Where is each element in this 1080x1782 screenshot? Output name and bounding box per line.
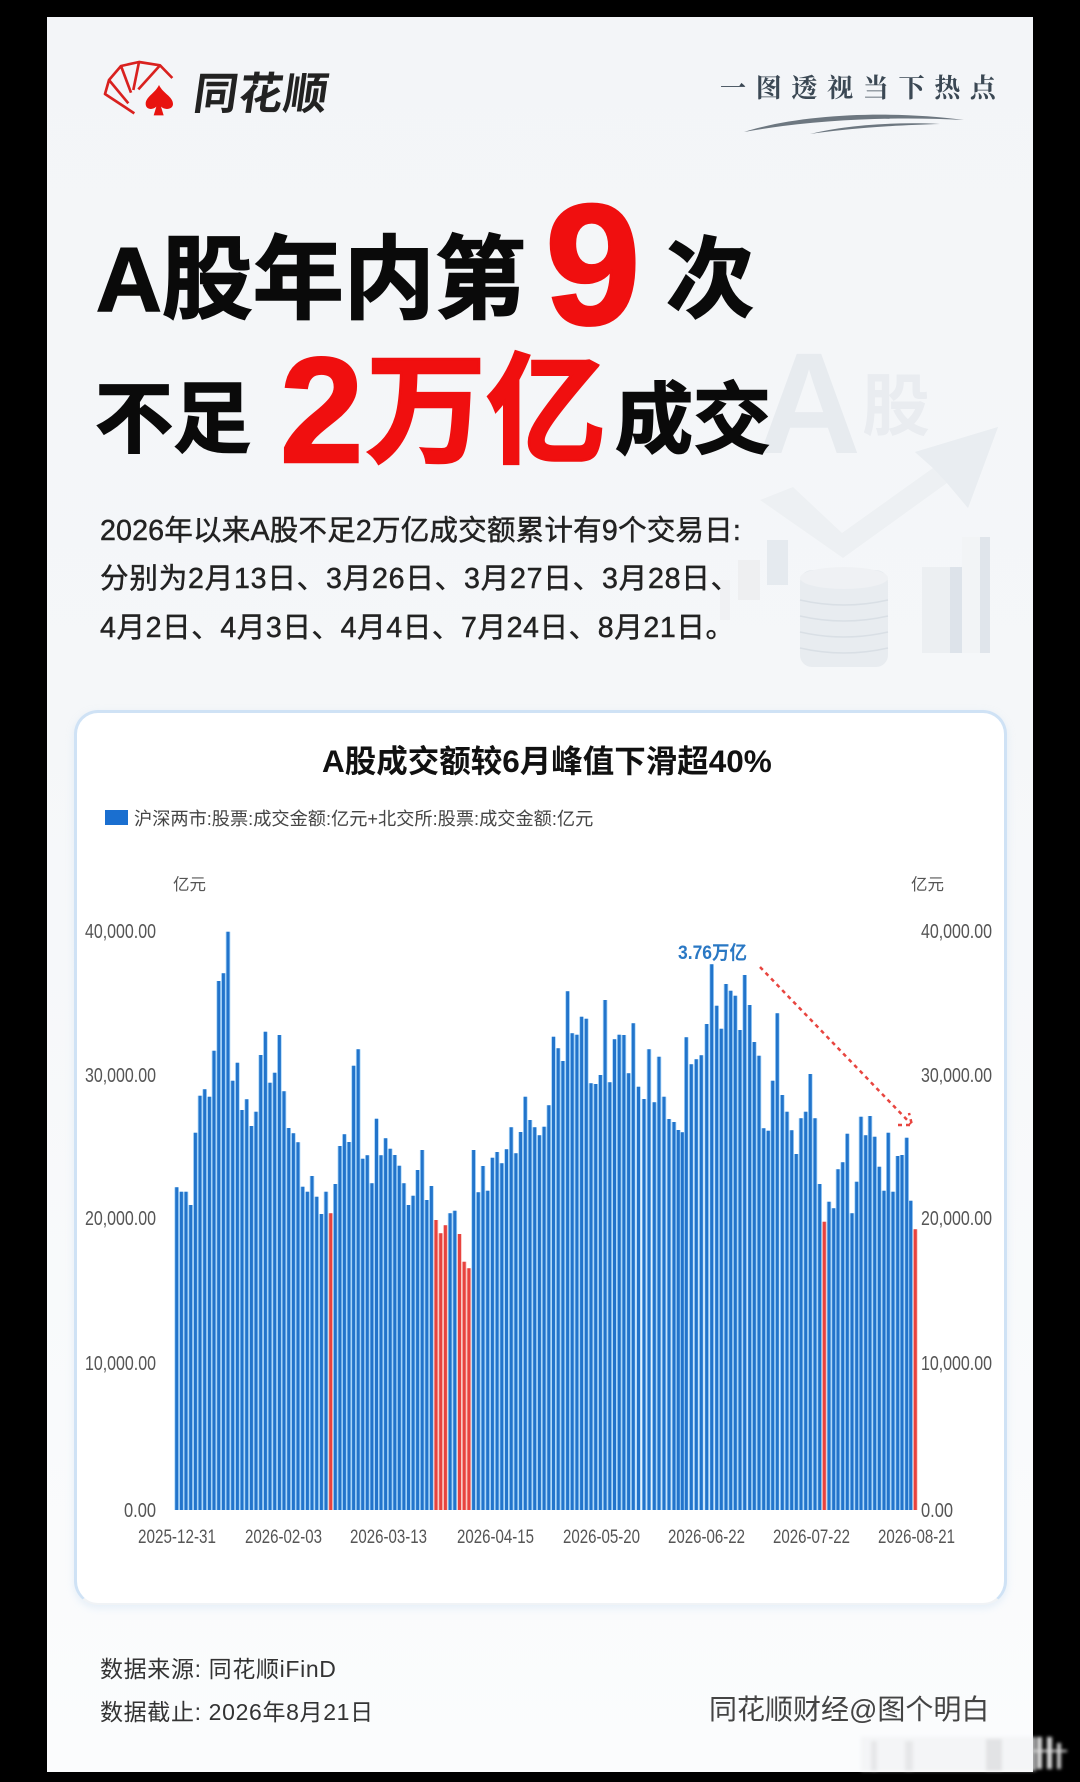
footer credit: 同花顺财经@图个明白	[709, 1694, 989, 1725]
title text: A股年内第: A股年内第	[96, 230, 526, 331]
title line 1	[96, 169, 754, 361]
right axis unit: 亿元	[911, 875, 944, 894]
logo: 同花顺	[104, 60, 333, 119]
right y axis labels: 30,000.00	[921, 1065, 992, 1087]
red bar halos	[331, 1213, 915, 1510]
data source: 数据来源: 同花顺iFinD	[100, 1656, 337, 1682]
description line 2: 分别为2月13日、3月26日、3月27日、3月28日、	[100, 563, 740, 595]
icon: fanned cards with spade	[104, 60, 174, 116]
x axis date labels: 2026-04-15	[457, 1527, 534, 1548]
x axis date labels: 2026-05-20	[563, 1527, 640, 1548]
title text: 不足: 不足	[95, 375, 251, 463]
right y axis labels: 40,000.00	[921, 921, 992, 943]
x axis date labels: 2026-08-21	[878, 1527, 955, 1548]
description line 1: 2026年以来A股不足2万亿成交额累计有9个交易日:	[100, 515, 741, 547]
title number: 9: 9	[545, 169, 641, 361]
right y axis labels: 0.00	[921, 1500, 953, 1522]
left y axis labels	[85, 921, 156, 1522]
slogan: 一图透视当下热点: 一图透视当下热点	[720, 74, 1006, 103]
title text: 万亿: 万亿	[366, 345, 606, 479]
red bars: sessions under 2 trillion	[331, 1213, 915, 1510]
right y axis labels: 20,000.00	[921, 1208, 992, 1230]
footer source notes	[100, 1656, 374, 1725]
right y axis labels	[921, 921, 992, 1522]
x axis date labels: 2026-03-13	[350, 1527, 427, 1548]
watermark smudge bottom right	[860, 1734, 1069, 1774]
left y axis labels: 0.00	[124, 1500, 156, 1522]
title text: 成交: 成交	[615, 376, 771, 464]
x axis date labels: 2026-02-03	[245, 1527, 322, 1548]
left y axis labels: 10,000.00	[85, 1353, 156, 1375]
left axis unit: 亿元	[173, 875, 206, 894]
watermark illustration: A股, arrow, coins and bars: A	[757, 323, 861, 484]
logo wordmark: 同花顺	[191, 70, 333, 119]
blue bars	[177, 932, 911, 1510]
left y axis labels: 30,000.00	[85, 1065, 156, 1087]
legend label: 沪深两市:股票:成交金额:亿元+北交所:股票:成交金额:亿元	[134, 809, 593, 829]
x axis date labels: 2025-12-31	[138, 1527, 216, 1548]
title text: 次: 次	[666, 230, 754, 329]
description line 3: 4月2日、4月3日、4月4日、7月24日、8月21日。	[100, 612, 735, 644]
title number: 2万亿: 2	[280, 326, 363, 494]
left y axis labels: 40,000.00	[85, 921, 156, 943]
x axis date labels	[138, 1527, 955, 1548]
panel: chart card	[74, 710, 1007, 1605]
x axis date labels: 2026-07-22	[773, 1527, 850, 1548]
description text	[100, 515, 741, 644]
title line 2	[95, 326, 771, 494]
legend swatch	[105, 810, 128, 825]
chart heading: A股成交额较6月峰值下滑超40%	[322, 743, 772, 779]
watermark illustration: A股, arrow, coins and bars: 股	[862, 369, 930, 445]
watermark illustration: A股, arrow, coins and bars	[757, 323, 998, 667]
x axis date labels: 2026-06-22	[668, 1527, 745, 1548]
data cutoff date: 数据截止: 2026年8月21日	[100, 1699, 374, 1725]
blue bar halos	[177, 932, 911, 1510]
right y axis labels: 10,000.00	[921, 1353, 992, 1375]
arrow: dotted decline from peak	[760, 967, 912, 1125]
slogan brush strokes	[744, 114, 964, 134]
peak callout: 3.76万亿: 3.76万亿	[678, 942, 747, 964]
left y axis labels: 20,000.00	[85, 1208, 156, 1230]
chart legend	[105, 809, 593, 829]
